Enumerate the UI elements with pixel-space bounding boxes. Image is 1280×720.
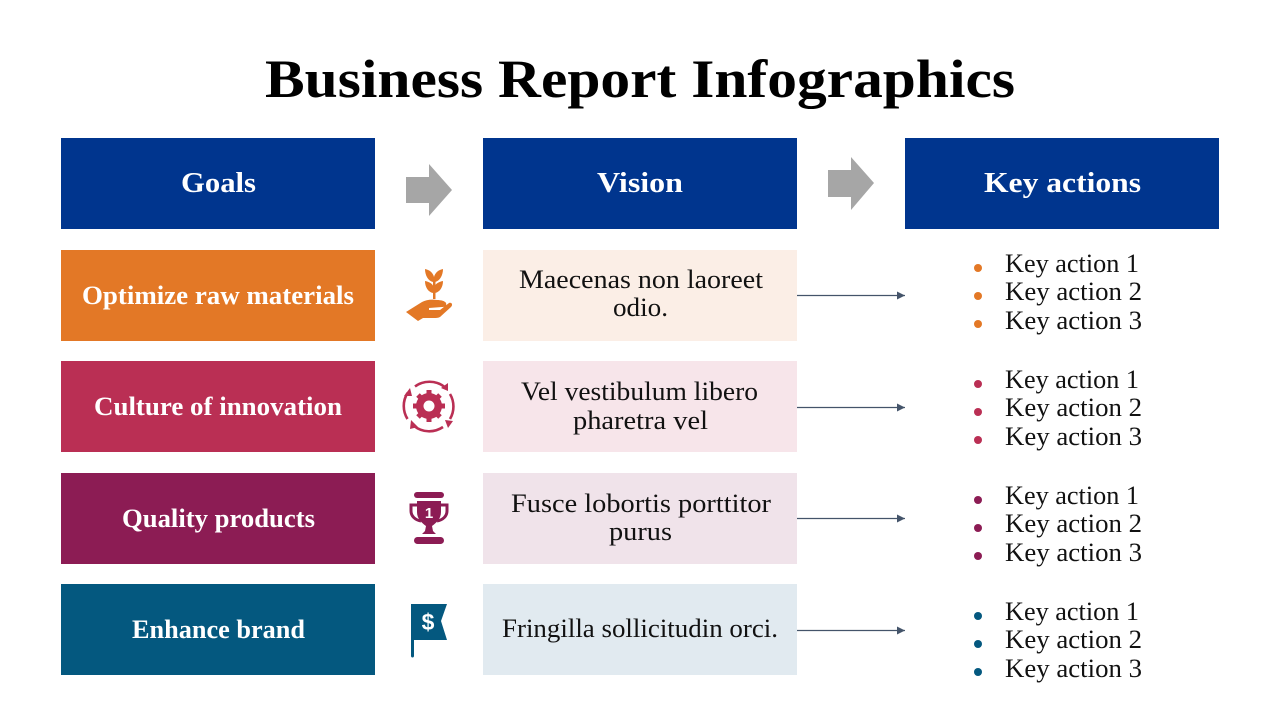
goal: Enhance brand: Enhance brand bbox=[132, 615, 306, 644]
goal: Quality products: Quality products bbox=[122, 504, 315, 533]
vision: Vel vestibulum libero pharetra vel: pharetra vel bbox=[573, 406, 708, 435]
key actions list: Key action 3 bbox=[1005, 654, 1142, 683]
key actions list bbox=[974, 481, 1142, 567]
key actions list: Key action 1 bbox=[1005, 249, 1139, 278]
vision: Vel vestibulum libero pharetra vel: Vel vestibulum libero bbox=[521, 377, 758, 406]
icon: trophy: 1 bbox=[425, 505, 433, 522]
header: Key actions: Key actions bbox=[984, 167, 1141, 199]
vision: Fusce lobortis porttitor purus bbox=[483, 473, 797, 564]
connector arrow bbox=[797, 630, 905, 632]
header: Vision bbox=[483, 138, 797, 229]
title: Business Report Infographics bbox=[265, 49, 1015, 109]
icon: plant in hand bbox=[406, 269, 452, 321]
header: Key actions bbox=[905, 138, 1219, 229]
key actions list: Key action 2 bbox=[1005, 625, 1142, 654]
goal: Enhance brand bbox=[61, 584, 375, 675]
row 1: Optimize raw materials bbox=[61, 249, 1142, 341]
arrow: vision to key actions bbox=[828, 157, 874, 210]
vision: Maecenas non laoreet odio: odio. bbox=[613, 293, 668, 322]
key actions list: Key action 3 bbox=[1005, 422, 1142, 451]
row 3: Quality products bbox=[61, 473, 1142, 567]
header: Goals: Goals bbox=[181, 167, 256, 199]
key actions list: Key action 1 bbox=[1005, 597, 1139, 626]
arrow: goals to vision bbox=[406, 164, 452, 216]
goal: Culture of innovation bbox=[61, 361, 375, 452]
header: Vision: Vision bbox=[597, 167, 683, 199]
vision: Fusce lobortis porttitor purus: purus bbox=[609, 517, 672, 546]
vision: Fusce lobortis porttitor purus: Fusce lobortis porttitor bbox=[511, 489, 771, 518]
connector arrow bbox=[797, 294, 905, 296]
vision: Maecenas non laoreet odio: Maecenas non laoreet bbox=[519, 265, 764, 294]
goal: Optimize raw materials: Optimize raw materials bbox=[82, 281, 354, 310]
key actions list: Key action 1 bbox=[1005, 481, 1139, 510]
icon: dollar flag bbox=[411, 604, 447, 658]
icon: gear with cycle arrows bbox=[404, 382, 453, 431]
goal: Optimize raw materials bbox=[61, 250, 375, 341]
goal: Quality products bbox=[61, 473, 375, 564]
key actions list: Key action 3 bbox=[1005, 538, 1142, 567]
key actions list: Key action 2 bbox=[1005, 393, 1142, 422]
vision: Maecenas non laoreet odio bbox=[483, 250, 797, 341]
vision: Vel vestibulum libero pharetra vel bbox=[483, 361, 797, 452]
key actions list bbox=[974, 597, 1142, 683]
row 2: Culture of innovation bbox=[61, 361, 1142, 452]
goal: Culture of innovation: Culture of innovation bbox=[94, 392, 343, 421]
key actions list: Key action 2 bbox=[1005, 509, 1142, 538]
key actions list: Key action 3 bbox=[1005, 306, 1142, 335]
icon: trophy bbox=[411, 492, 447, 544]
row 4: Enhance brand bbox=[61, 584, 1142, 683]
connector arrow bbox=[797, 518, 905, 520]
vision: Fringilla sollicitudin orci bbox=[483, 584, 797, 675]
connector arrow bbox=[797, 406, 905, 408]
header: Goals bbox=[61, 138, 375, 229]
key actions list: Key action 2 bbox=[1005, 277, 1142, 306]
vision: Fringilla sollicitudin orci: Fringilla sollicitudin orci. bbox=[502, 614, 778, 643]
icon: dollar flag: $ bbox=[422, 609, 435, 635]
key actions list: Key action 1 bbox=[1005, 365, 1139, 394]
key actions list bbox=[974, 249, 1142, 335]
key actions list bbox=[974, 365, 1142, 451]
